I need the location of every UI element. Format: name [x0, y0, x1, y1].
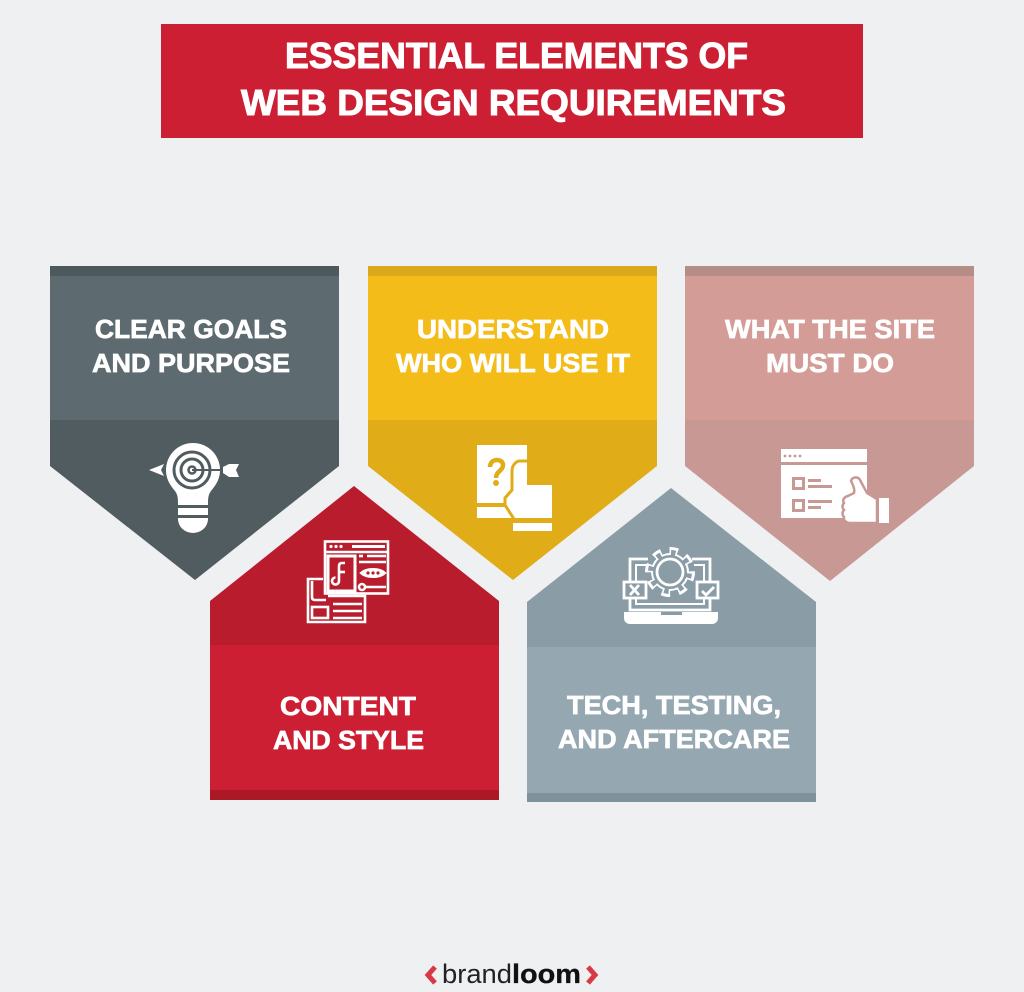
icon: browser window with thumbs up	[781, 449, 889, 523]
heading: what the site: WHAT THE SITE	[725, 314, 935, 344]
heading: understand: WHO WILL USE IT	[396, 348, 630, 378]
panel: understand who will use it	[368, 266, 657, 580]
icon: laptop with gear and checks	[624, 551, 718, 624]
heading: content and style	[273, 691, 424, 755]
heading: content and style: CONTENT	[280, 691, 416, 721]
heading: clear goals	[92, 314, 290, 378]
icon: light bulb with target	[149, 443, 239, 533]
panel: content and style	[210, 486, 499, 800]
title banner	[161, 24, 863, 138]
logo: brandloom: brand	[442, 959, 512, 989]
heading: clear goals: CLEAR GOALS	[95, 314, 287, 344]
icon: hand tapping question mark	[477, 445, 552, 531]
logo: brandloom	[428, 959, 595, 989]
heading: understand: UNDERSTAND	[417, 314, 609, 344]
heading: understand	[396, 314, 630, 378]
heading: what the site: MUST DO	[766, 348, 894, 378]
icon: layout windows with music note	[308, 542, 388, 622]
heading: what the site	[725, 314, 935, 378]
panel: tech, testing, and aftercare	[527, 488, 816, 802]
heading: tech, testing	[558, 690, 790, 754]
heading: content and style: AND STYLE	[273, 725, 424, 755]
panel: what the site must do	[685, 266, 974, 581]
heading: tech, testing: TECH, TESTING,	[567, 690, 781, 720]
panel: clear goals and purpose	[50, 266, 339, 580]
logo: brandloom: loom	[512, 959, 581, 989]
heading: clear goals: AND PURPOSE	[92, 348, 290, 378]
heading: tech, testing: AND AFTERCARE	[558, 724, 790, 754]
title banner: ESSENTIAL ELEMENTS OF	[285, 35, 748, 76]
title banner: WEB DESIGN REQUIREMENTS	[241, 82, 786, 123]
